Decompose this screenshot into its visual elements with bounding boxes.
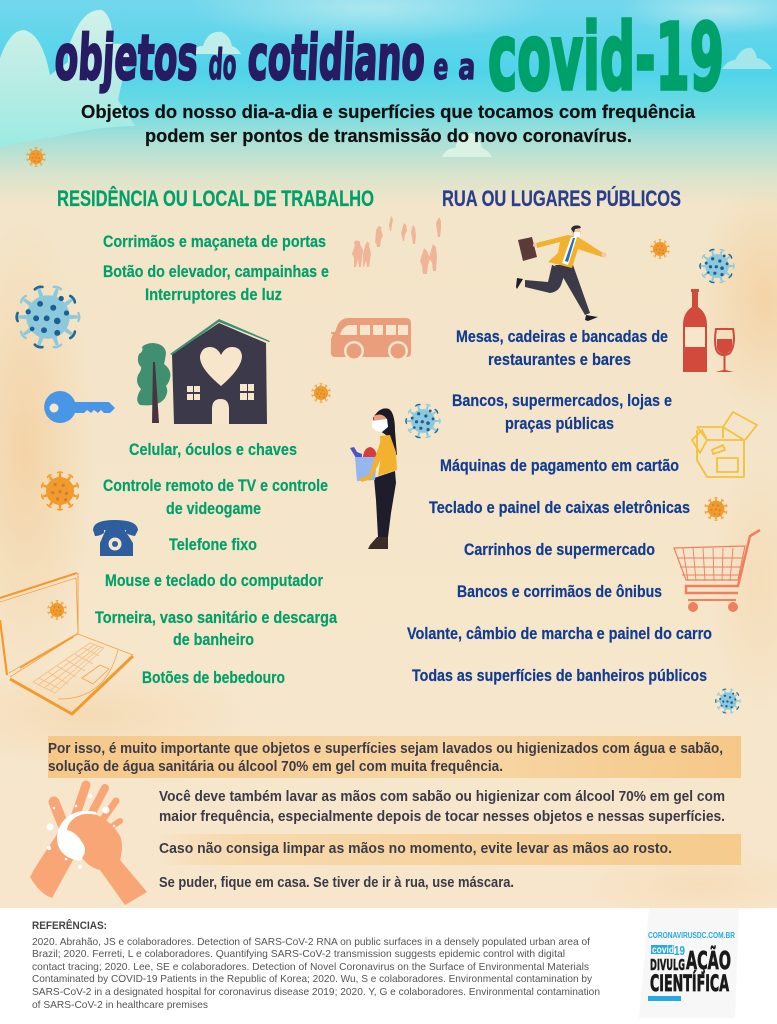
title — [53, 4, 724, 111]
references: contact tracing; 2020. Lee, SE e colaboradores. Detection of Novel Coronavirus on the Surface of Environmental Materials — [32, 961, 589, 973]
logo: divulgação científica — [639, 908, 739, 1018]
icon: virus blue large — [17, 286, 79, 348]
list: rua: praças públicas — [505, 414, 614, 433]
heading: residência: RESIDÊNCIA OU LOCAL DE TRABALHO — [57, 186, 374, 211]
list: residência: Interruptores de luz — [145, 285, 282, 304]
list: rua: Carrinhos de supermercado — [464, 540, 655, 559]
footer panel — [0, 908, 777, 1024]
title: a — [457, 47, 477, 88]
logo: divulgação científica: covid — [652, 945, 674, 956]
list: rua: Máquinas de pagamento em cartão — [440, 456, 679, 475]
list: rua: Mesas, cadeiras e bancadas de — [456, 327, 668, 346]
subtitle: podem ser pontos de transmissão do novo coronavírus. — [145, 126, 632, 146]
subtitle — [81, 102, 696, 146]
icon: telephone — [93, 520, 138, 556]
text: lavar as mãos: maior frequência, especialmente depois de tocar nesses objetos e nessas superfícies. — [159, 809, 725, 825]
list: rua: Volante, câmbio de marcha e painel do carro — [407, 624, 712, 643]
references: Brazil; 2020. Ferreti, L e colaboradores. Quantifying SARS-CoV-2 transmission suggests epidemic control with digital — [32, 948, 565, 960]
logo: divulgação científica: AÇÃO — [686, 946, 731, 975]
list: residência: Botões de bebedouro — [142, 668, 285, 687]
logo: divulgação científica: DIVULG — [650, 956, 685, 974]
list: residência: Botão do elevador, campainhas e — [103, 262, 329, 281]
list: residência: Controle remoto de TV e controle — [103, 476, 328, 495]
icon: people crowd — [352, 216, 441, 274]
icon: bus — [331, 318, 411, 361]
icon: virus orange large — [41, 472, 79, 510]
band: recomendação principal: Por isso, é muito importante que objetos e superfícies sejam lavados ou higienizados com água e sabão, — [48, 741, 723, 757]
icon: woman with bag — [350, 408, 397, 549]
icon: open box — [692, 412, 757, 477]
references — [32, 919, 600, 1011]
icon: virus blue near woman — [406, 404, 440, 438]
icon: house and tree — [137, 319, 270, 424]
band: evitar o rosto — [159, 834, 741, 865]
logo: divulgação científica: 19 — [674, 943, 685, 958]
icon: wine bottle and glass — [683, 289, 734, 372]
icon: virus orange near bus — [312, 384, 330, 402]
icon: key — [44, 391, 115, 423]
list: residência: Mouse e teclado do computador — [105, 571, 323, 590]
list: rua — [407, 327, 712, 685]
band: recomendação principal — [48, 736, 741, 778]
list: residência: Celular, óculos e chaves — [129, 440, 297, 459]
icon: virus orange right — [705, 498, 727, 520]
title: objetos — [53, 21, 200, 94]
list: residência: Telefone fixo — [169, 535, 257, 554]
list: residência: Corrimãos e maçaneta de portas — [103, 232, 326, 251]
band: recomendação principal: solução de água sanitária ou álcool 70% em gel com muita frequência. — [48, 759, 503, 775]
icon: laptop — [0, 573, 133, 714]
title: e — [432, 47, 450, 88]
references: REFERÊNCIAS: — [32, 919, 107, 932]
clouds — [0, 10, 772, 157]
list: rua: Bancos e corrimãos de ônibus — [457, 582, 662, 601]
title: do — [207, 40, 238, 89]
icon: virus orange top left — [27, 148, 45, 166]
list: residência: de banheiro — [173, 630, 254, 649]
title: cotidiano — [246, 21, 427, 94]
references: 2020. Abrahão, JS e colaboradores. Detection of SARS-CoV-2 RNA on public surfaces in a densely populated urban area of — [32, 936, 590, 948]
references: SARS-CoV-2 in a designated hospital for coronavirus disease 2019; 2020. Y, G e colaboradores. Environmental contamination — [32, 986, 600, 998]
band: evitar o rosto: Caso não consiga limpar as mãos no momento, evite levar as mãos ao rosto. — [159, 841, 672, 857]
icon: washing hands — [30, 785, 147, 905]
icon: running man — [516, 225, 606, 321]
text: lavar as mãos — [159, 789, 725, 825]
logo: divulgação científica: CORONAVIRUSDC.COM.BR — [648, 931, 735, 940]
references: Contaminated by COVID-19 Patients in the Republic of Korea; 2020. Wu, S e colaboradores. Environmental contamination by — [32, 973, 593, 985]
icon: virus blue bottom right — [716, 689, 740, 713]
list: rua: Bancos, supermercados, lojas e — [452, 391, 672, 410]
text: fique em casa: Se puder, fique em casa. Se tiver de ir à rua, use máscara. — [159, 875, 514, 891]
list: residência: Torneira, vaso sanitário e descarga — [95, 608, 337, 627]
icon: virus orange near man — [651, 240, 669, 258]
icon: virus orange on laptop — [48, 600, 66, 620]
text: lavar as mãos: Você deve também lavar as mãos com sabão ou higienizar com álcool 70% em gel com — [159, 789, 725, 805]
list: rua: Teclado e painel de caixas eletrônicas — [429, 498, 690, 517]
icon: shopping cart — [674, 530, 760, 612]
list: rua: Todas as superfícies de banheiros públicos — [412, 666, 707, 685]
heading: rua: RUA OU LUGARES PÚBLICOS — [442, 186, 681, 211]
list: residência — [95, 232, 337, 687]
icon: virus blue top right — [700, 249, 734, 283]
subtitle: Objetos do nosso dia-a-dia e superfícies que tocamos com frequência — [81, 102, 696, 122]
references: of SARS-CoV-2 in healthcare premises — [32, 999, 208, 1011]
list: residência: de videogame — [166, 499, 261, 518]
list: rua: restaurantes e bares — [488, 350, 631, 369]
